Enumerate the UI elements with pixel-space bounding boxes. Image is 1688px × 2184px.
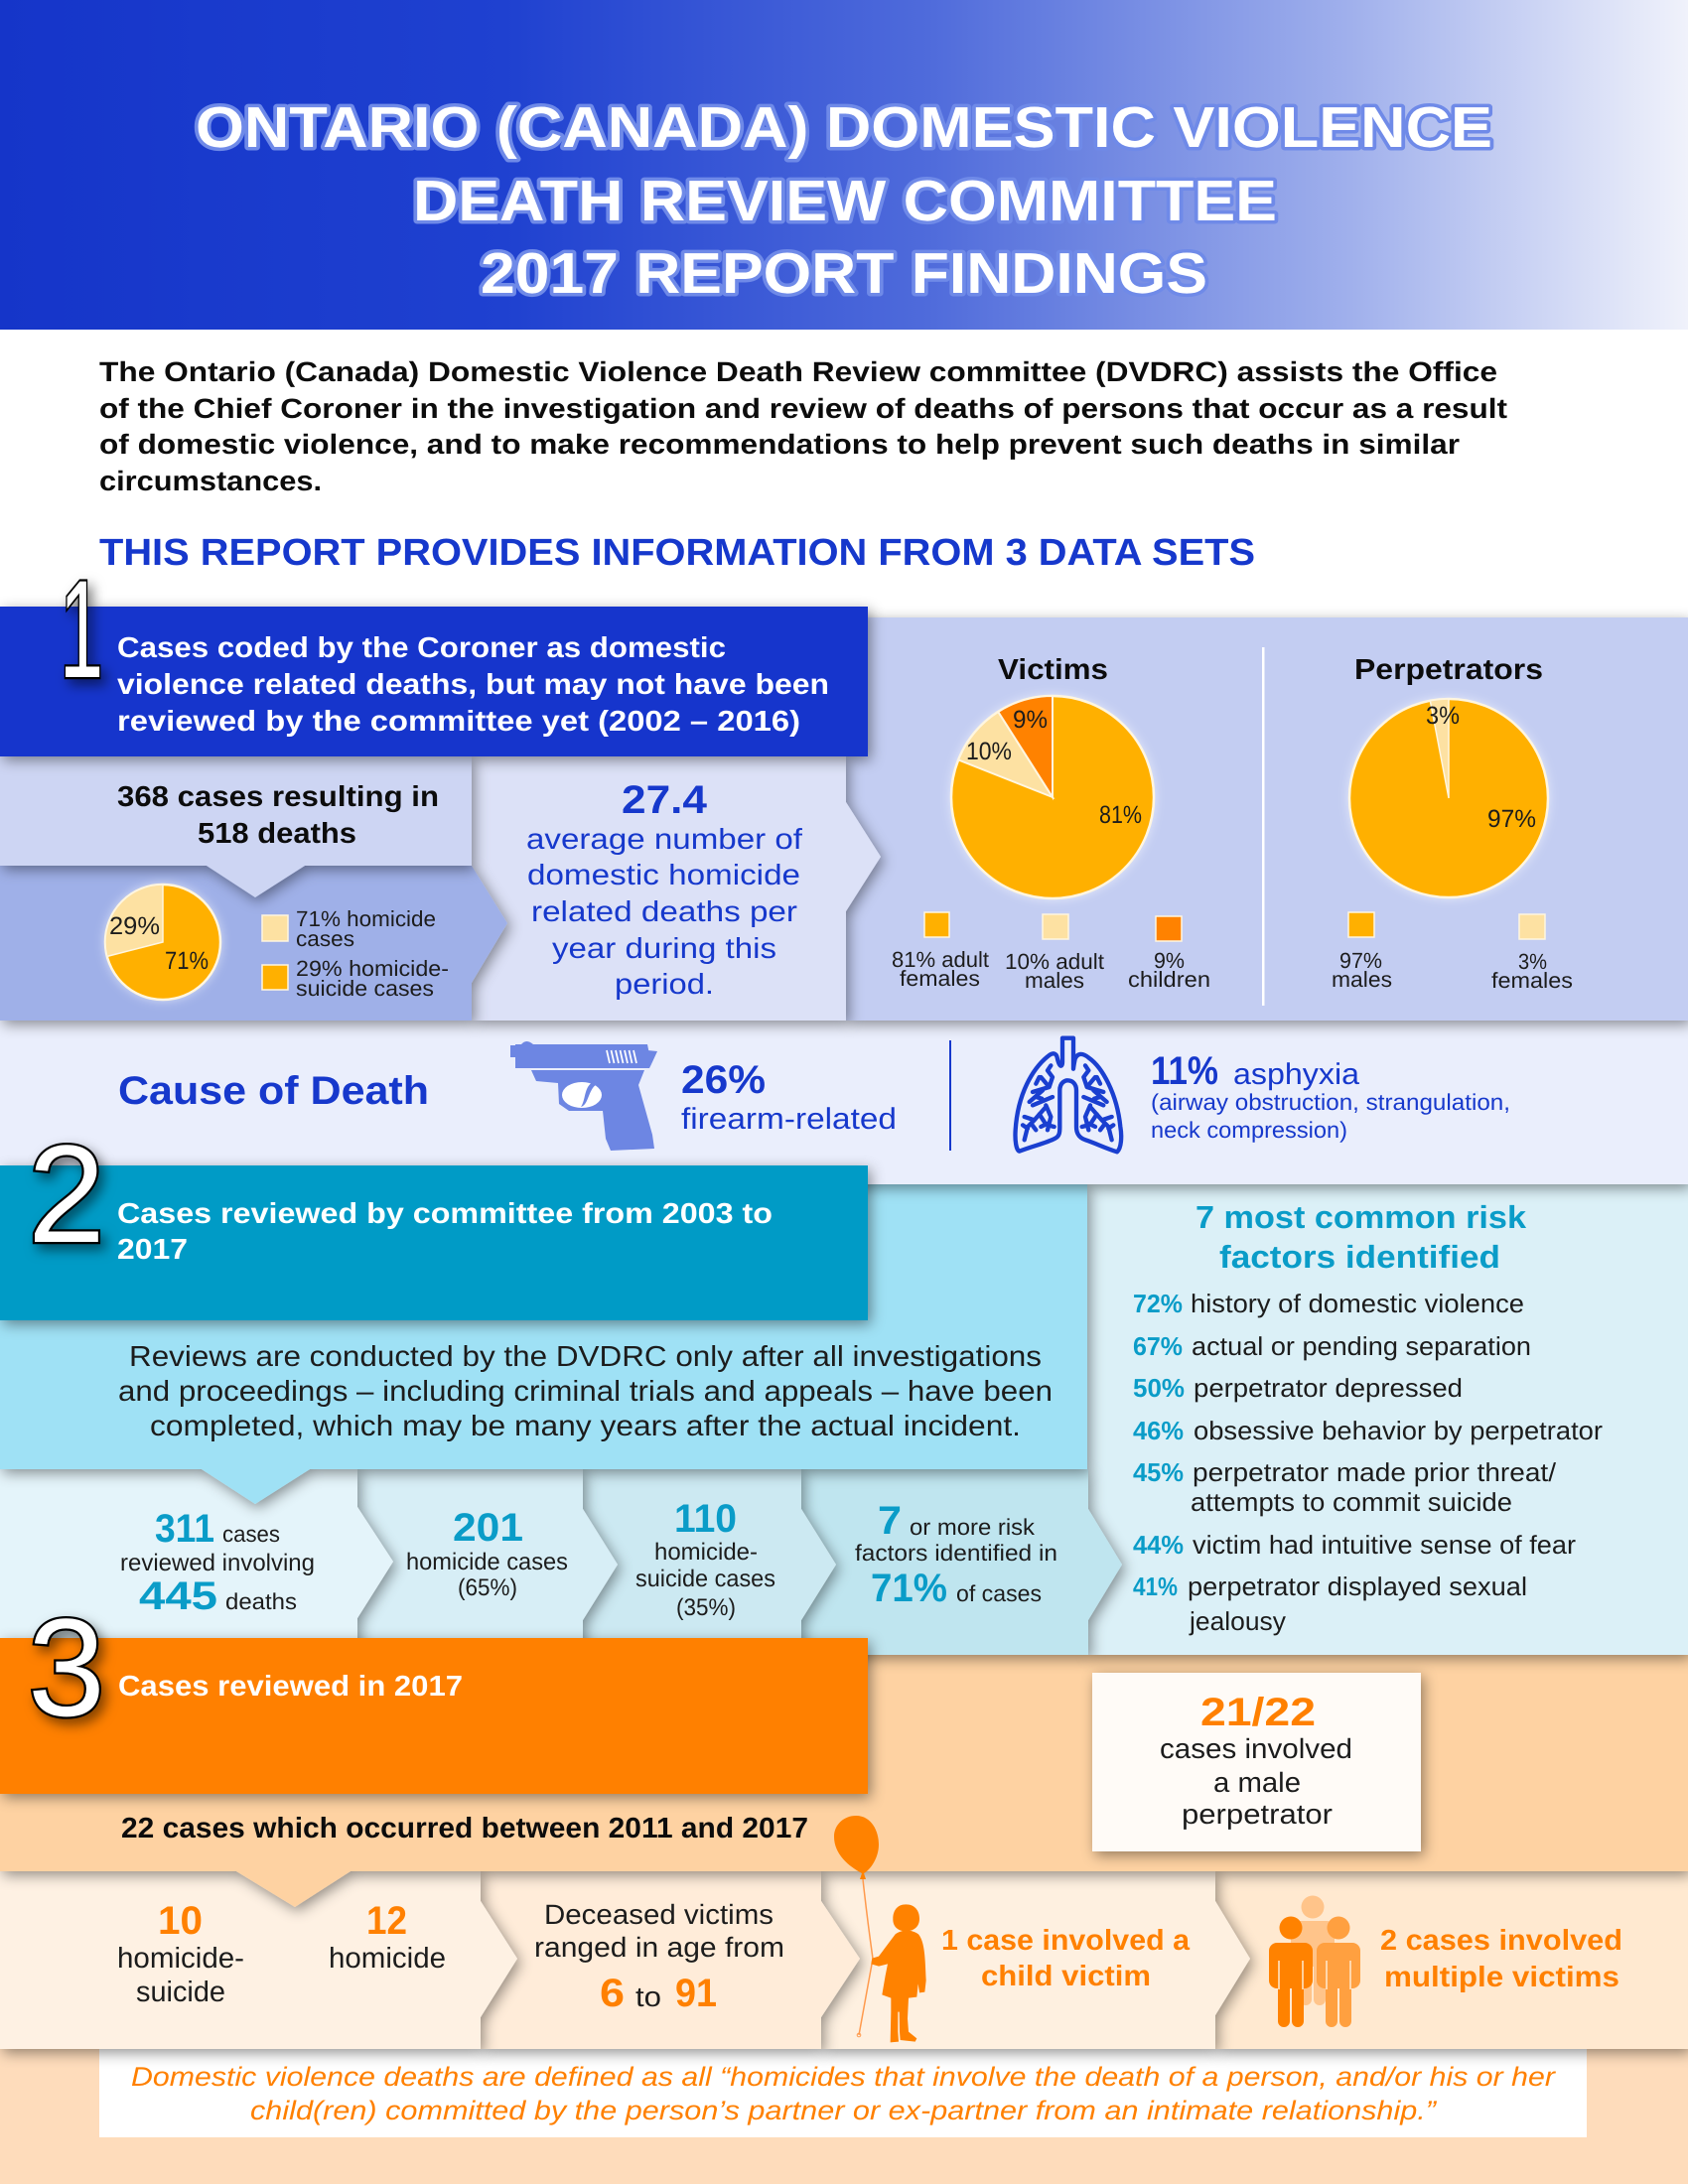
stat: 201 homicide cases [406,1506,568,1601]
stat: multiple victims: multiple victims [1384,1962,1619,1993]
stat: 7 or more risk factors: factors identified in [855,1540,1057,1566]
list: risk factor items: 41% [1133,1571,1178,1601]
stat: 10 homicide-suicide [117,1899,244,2008]
legend: perpetrators: males [1332,967,1392,992]
stat: 110 homicide-suicide cases: (35%) [676,1594,736,1621]
stat: 11% asphyxia [1151,1049,1510,1143]
heading: cause of death: Cause of Death [118,1069,429,1113]
panel: victims and perpetrators [846,617,1688,1021]
icon: lungs [1015,1038,1121,1152]
stat: 12 homicide [329,1899,446,1975]
pie chart: perpetrators: 97% [1487,805,1536,833]
panel: section 3 statistics row [0,1871,1688,2049]
panel: section 2 description: completed, which may be many years after the actual incident. [150,1411,1021,1442]
pie chart: victims: 81% [1099,801,1142,829]
text block: introduction: of the Chief Coroner in the investigation and review of deaths of persons that occur as a result [99,393,1507,424]
stat: victim age range: 6 [600,1972,625,2015]
list: risk factor items [1133,1289,1603,1636]
legend: homicide breakdown: cases [296,926,354,951]
list: risk factor items: attempts to commit suicide [1191,1487,1512,1517]
stat: child victim [941,1925,1191,1992]
panel: 368 cases [0,756,472,897]
list: risk factor items: actual or pending separation [1192,1331,1531,1361]
callout: 21/22 male perpetrator: a male [1213,1767,1301,1798]
icon: balloon [834,1816,879,2037]
heading panel: section 1: reviewed by the committee yet (2002 – 2016) [117,706,800,738]
list: risk factor items: victim had intuitive sense of fear [1193,1530,1576,1560]
stat: 10 homicide-suicide: 10 [158,1899,203,1943]
stat: victim age range: 91 [675,1972,717,2015]
stat: 26% firearm-related [681,1058,897,1136]
legend: victims: 9% [1154,948,1185,973]
panel: cause of death [0,1021,1688,1184]
panel: 368 cases: 368 cases resulting in [117,781,439,813]
list: risk factor items: 50% [1133,1373,1185,1403]
list: risk factor items: history of domestic violence [1191,1289,1524,1318]
stat: 201 homicide cases: 201 [453,1506,523,1550]
stat: 311 cases 445 deaths: cases [222,1521,280,1547]
stat: 10 homicide-suicide: homicide- [117,1943,244,1975]
callout: 21/22 male perpetrator: 21/22 [1200,1691,1316,1734]
stat: 110 homicide-suicide cases: homicide- [654,1539,758,1566]
stat: 26% firearm-related: 26% [681,1058,766,1102]
list: risk factor items: jealousy [1189,1606,1286,1636]
heading panel: section 2: Cases reviewed by committee from 2003 to [117,1198,773,1230]
list: risk factor items: 44% [1133,1530,1184,1560]
stat: multiple victims [1380,1925,1622,1993]
icon: handgun [510,1041,657,1151]
heading: victims: Victims [998,654,1108,686]
numeral 2: 2 [28,1116,105,1272]
panel: homicide breakdown [0,866,507,1021]
panel: 27.4 average homicide deaths: 27.4 [622,778,708,822]
legend: victims [892,912,1210,993]
heading panel: section 3 [0,1589,868,1794]
stat: 311 cases 445 deaths [120,1507,315,1618]
legend: homicide breakdown [262,906,449,1001]
header banner [0,0,1688,330]
legend: victims: males [1025,968,1084,993]
list: risk factor items: 46% [1133,1416,1184,1445]
legend: homicide breakdown: 29% homicide- [296,956,449,981]
text block: introduction: The Ontario (Canada) Domestic Violence Death Review committee (DVDRC) assists the Office [99,356,1497,387]
heading panel: section 3: Cases reviewed in 2017 [118,1671,463,1703]
stat: victim age range: ranged in age from [534,1932,784,1963]
stat: 311 cases 445 deaths: 311 [155,1507,214,1551]
stat: victim age range: Deceased victims [544,1899,774,1930]
list: risk factor items: obsessive behavior by perpetrator [1194,1416,1603,1445]
legend: victims: females [900,966,980,991]
panel: section 2 description: and proceedings – including criminal trials and appeals – have been [118,1376,1053,1408]
panel: section 3 band [0,1655,1688,1907]
panel: section 2 description: Reviews are conducted by the DVDRC only after all investigations [129,1341,1042,1373]
legend: perpetrators: females [1491,968,1573,993]
pie chart: homicide vs homicide-suicide: 71% [165,947,209,975]
heading: data sets: THIS REPORT PROVIDES INFORMATION FROM 3 DATA SETS [99,532,1255,574]
title: ONTARIO (CANADA) DOMESTIC VIOLENCE [196,95,1492,160]
stat: 7 or more risk factors: or more risk [910,1514,1036,1540]
panel: 27.4 average homicide deaths: average number of [526,824,803,856]
pie chart: victims [951,696,1154,898]
callout: definition quote: Domestic violence deaths are defined as all “homicides that involve the death of a person, and/or his or her [131,2062,1556,2092]
legend: perpetrators: 97% [1339,948,1382,973]
heading panel: section 1 [0,551,868,756]
stat: 7 or more risk factors: of cases [956,1580,1042,1606]
stat: 110 homicide-suicide cases: 110 [674,1497,737,1541]
stat: 201 homicide cases: homicide cases [406,1549,568,1575]
heading: perpetrators: Perpetrators [1354,654,1543,686]
panel: section 2 statistics row [0,1469,1122,1655]
stat: 311 cases 445 deaths: reviewed involving [120,1550,315,1576]
heading: risk factors [1196,1199,1526,1275]
panel: 27.4 average homicide deaths [472,756,881,1021]
stat: 11% asphyxia: asphyxia [1233,1058,1359,1091]
pie chart: homicide vs homicide-suicide: 29% [109,912,160,940]
stat: 12 homicide: homicide [329,1943,446,1975]
callout: definition quote [99,2045,1587,2137]
legend: homicide breakdown: suicide cases [296,976,434,1001]
stat: victim age range: to [635,1981,661,2012]
list: risk factor items: perpetrator made prior threat/ [1193,1457,1557,1487]
pie chart: homicide vs homicide-suicide [105,885,220,1000]
numeral 3: 3 [28,1589,105,1745]
legend: victims: 10% adult [1005,949,1104,974]
heading: risk factors: 7 most common risk [1196,1199,1526,1235]
stat: 11% asphyxia: 11% [1151,1049,1218,1093]
text block: introduction [99,356,1507,496]
stat: child victim: child victim [981,1961,1151,1992]
callout: 21/22 male perpetrator: cases involved [1160,1733,1352,1764]
text block: introduction: circumstances. [99,466,322,496]
panel: 27.4 average homicide deaths: year during this [552,933,776,965]
stat: 12 homicide: 12 [366,1899,407,1943]
list: risk factor items: 45% [1133,1457,1184,1487]
heading: risk factors: factors identified [1219,1239,1500,1275]
stat: 110 homicide-suicide cases [635,1497,775,1621]
title [196,95,1492,306]
stat: 110 homicide-suicide cases: suicide cases [635,1566,775,1592]
callout: definition quote: child(ren) committed by the person’s partner or ex-partner from an intimate relationship.” [250,2096,1437,2125]
panel: section 2 description [0,1184,1087,1504]
panel: 27.4 average homicide deaths: period. [615,969,714,1001]
legend: homicide breakdown: 71% homicide [296,906,436,931]
stat: 311 cases 445 deaths: 445 [139,1574,217,1618]
numeral 1: 1 [60,551,103,707]
stat: 11% asphyxia: (airway obstruction, strangulation, [1151,1089,1510,1115]
legend: perpetrators: 3% [1518,949,1547,974]
heading panel: section 2: 2017 [117,1234,188,1266]
title: DEATH REVIEW COMMITTEE [413,169,1277,233]
legend: victims: 81% adult [892,947,989,972]
panel: 27.4 average homicide deaths: related deaths per [531,896,797,928]
stat: child victim: 1 case involved a [941,1925,1191,1957]
stat: victim age range [534,1899,784,2015]
pie chart: victims: 9% [1013,706,1048,734]
stat: 7 or more risk factors [855,1499,1057,1610]
panel: 368 cases: 518 deaths [198,818,356,850]
stat: 10 homicide-suicide: suicide [136,1977,225,2008]
stat: 311 cases 445 deaths: deaths [225,1588,297,1614]
list: risk factor items: 72% [1133,1289,1183,1318]
legend: perpetrators [1332,912,1573,993]
panel: risk factors [1087,1184,1688,1655]
text block: introduction: of domestic violence, and to make recommendations to help prevent such deaths in similar [99,429,1460,460]
panel: 27.4 average homicide deaths: domestic homicide [527,860,800,891]
stat: 26% firearm-related: firearm-related [681,1103,897,1136]
stat: 7 or more risk factors: 71% [871,1567,947,1610]
stat: 7 or more risk factors: 7 [878,1499,902,1543]
list: risk factor items: 67% [1133,1331,1183,1361]
heading panel: section 2 [0,1116,868,1320]
legend: victims: children [1128,967,1210,992]
pie chart: perpetrators: 3% [1426,702,1460,730]
pie chart: perpetrators [1349,699,1548,897]
callout: 21/22 male perpetrator: perpetrator [1182,1799,1333,1830]
icon: three people [1269,1896,1360,2027]
icon: child silhouette [871,1904,926,2042]
title: 2017 REPORT FINDINGS [481,241,1207,306]
heading panel: section 1: Cases coded by the Coroner as domestic [117,632,726,664]
stat: 11% asphyxia: neck compression) [1151,1117,1347,1143]
text: 22 cases: 22 cases which occurred between 2011 and 2017 [121,1813,808,1844]
pie chart: victims: 10% [966,738,1012,765]
list: risk factor items: perpetrator depressed [1194,1373,1463,1403]
list: risk factor items: perpetrator displayed sexual [1188,1571,1527,1601]
callout: 21/22 male perpetrator [1092,1673,1421,1851]
heading panel: section 1: violence related deaths, but may not have been [117,669,829,701]
stat: multiple victims: 2 cases involved [1380,1925,1622,1957]
stat: 201 homicide cases: (65%) [458,1574,517,1601]
